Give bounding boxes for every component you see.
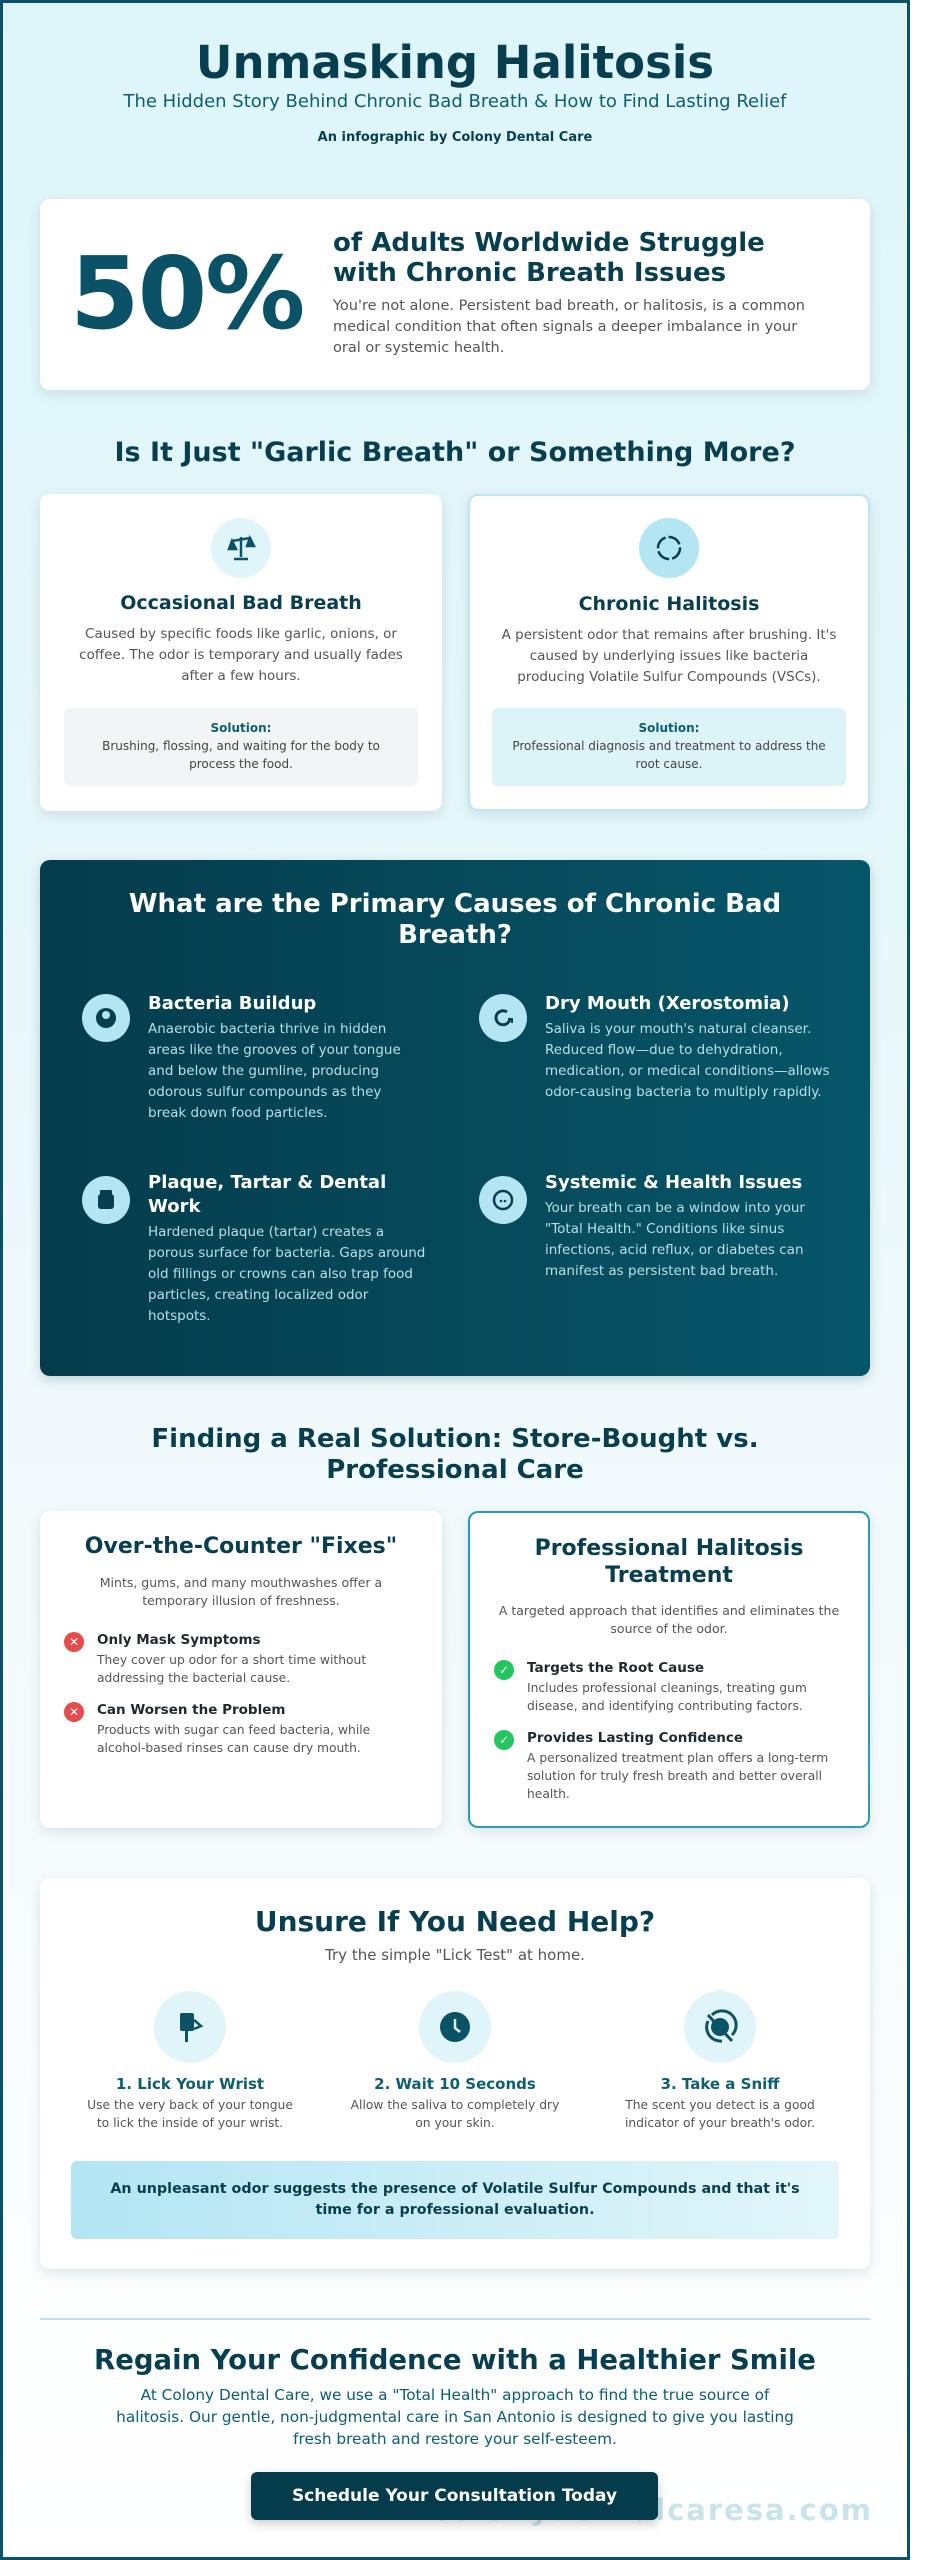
icon: cycle	[639, 518, 699, 578]
step 1	[87, 1991, 293, 2130]
item: confidence: A personalized treatment plan offers a long-term solution for truly fresh breath and better overall health.	[527, 1751, 828, 1801]
item: root: Targets the Root Cause	[527, 1660, 704, 1676]
button	[251, 2472, 658, 2520]
cause: bacteria: Anaerobic bacteria thrive in hidden areas like the grooves of your tongue and below the gumline, producing odorous sulfur compounds as they break down food particles.	[148, 1021, 401, 1121]
panel: OTC: Over-the-Counter "Fixes"	[85, 1534, 397, 1559]
step 1: 1. Lick Your Wrist	[116, 2075, 264, 2093]
panel: professional	[468, 1511, 870, 1828]
item: confidence	[494, 1730, 828, 1801]
callout	[71, 2161, 839, 2239]
step 3: 3. Take a Sniff	[661, 2075, 779, 2093]
byline: An infographic by Colony Dental Care	[318, 130, 592, 145]
icon: x: ✕	[69, 1635, 79, 1649]
step 3	[625, 1991, 815, 2130]
card title: Occasional Bad Breath	[120, 592, 362, 614]
icon: scale	[211, 518, 271, 578]
stat heading: of Adults Worldwide Struggle	[333, 228, 765, 258]
cause: plaque: Plaque, Tartar & Dental Work	[148, 1172, 386, 1217]
item: worsen	[64, 1702, 370, 1755]
cause: plaque	[82, 1172, 425, 1324]
item: mask: They cover up odor for a short time without addressing the bacterial cause.	[97, 1653, 366, 1685]
cause: bacteria: Bacteria Buildup	[148, 993, 316, 1014]
panel: lick test: Try the simple "Lick Test" at home.	[325, 1946, 585, 1964]
icon: wrist	[154, 1991, 226, 2063]
icon: tooth	[82, 1176, 130, 1224]
solution box: Solution:	[210, 721, 271, 735]
solution box: Brushing, flossing, and waiting for the body to process the food.	[102, 739, 380, 771]
card text: Caused by specific foods like garlic, onions, or coffee. The odor is temporary and usually fades after a few hours.	[79, 626, 403, 684]
panel: causes	[40, 860, 870, 1376]
step 3: The scent you detect is a good indicator of your breath's odor.	[625, 2098, 815, 2130]
step 2: 2. Wait 10 Seconds	[374, 2075, 536, 2093]
panel: chronic	[468, 494, 870, 811]
closing heading: Regain Your Confidence with a Healthier Smile	[94, 2344, 816, 2376]
stat text: You're not alone. Persistent bad breath, or halitosis, is a common medical condition that often signals a deeper imbalance in your oral or systemic health.	[333, 298, 805, 356]
item: worsen: Can Worsen the Problem	[97, 1702, 285, 1718]
solution box	[492, 708, 846, 786]
cause: systemic	[479, 1172, 805, 1279]
stat heading: with Chronic Breath Issues	[333, 258, 726, 288]
stat heading	[333, 228, 765, 288]
icon: no smell	[684, 1991, 756, 2063]
panel: professional: A targeted approach that identifies and eliminates the source of the odor.	[499, 1603, 839, 1636]
panel: lick test	[40, 1878, 870, 2269]
icon: clock	[419, 1991, 491, 2063]
icon: check: ✓	[499, 1733, 509, 1747]
solution box: Professional diagnosis and treatment to address the root cause.	[512, 739, 826, 771]
icon: x: ✕	[69, 1705, 79, 1719]
step 2	[350, 1991, 559, 2130]
step 1: Use the very back of your tongue to lick the inside of your wrist.	[87, 2098, 293, 2130]
cause: systemic: Systemic & Health Issues	[545, 1172, 802, 1193]
callout: An unpleasant odor suggests the presence of Volatile Sulfur Compounds and that it's time for a professional evaluation.	[110, 2181, 800, 2218]
solution box	[64, 708, 418, 786]
card title: Chronic Halitosis	[579, 593, 759, 615]
icon: check: ✓	[499, 1663, 509, 1677]
panel: lick test: Unsure If You Need Help?	[255, 1905, 655, 1938]
cause: dry mouth: Dry Mouth (Xerostomia)	[545, 993, 790, 1014]
icon: x	[64, 1632, 84, 1652]
icon: face	[479, 1176, 527, 1224]
icon: x	[64, 1702, 84, 1722]
item: root: Includes professional cleanings, treating gum disease, and identifying contributing factors.	[527, 1681, 807, 1713]
panel: OTC	[40, 1511, 442, 1828]
big stat: 50%	[70, 235, 303, 352]
cause: dry mouth: Saliva is your mouth's natural cleanser. Reduced flow—due to dehydration, medication, or medical conditions—allows odor-causing bacteria to multiply rapidly.	[545, 1021, 830, 1100]
cause: plaque: Hardened plaque (tartar) creates a porous surface for bacteria. Gaps around old fillings or crowns can also trap food particles, creating localized odor hotspots.	[148, 1224, 425, 1324]
icon: bacteria	[82, 994, 130, 1042]
cause: dry mouth	[479, 993, 830, 1100]
step 2: Allow the saliva to completely dry on your skin.	[351, 2098, 559, 2130]
panel: OTC: Mints, gums, and many mouthwashes offer a temporary illusion of freshness.	[100, 1575, 382, 1608]
item: mask	[64, 1632, 366, 1685]
card text: A persistent odor that remains after brushing. It's caused by underlying issues like bacteria producing Volatile Sulfur Compounds (VSCs).	[502, 627, 836, 685]
button: Schedule Your Consultation Today	[292, 2486, 617, 2506]
item: confidence: Provides Lasting Confidence	[527, 1730, 743, 1746]
item: root	[494, 1660, 807, 1713]
item: worsen: Products with sugar can feed bacteria, while alcohol-based rinses can cause dry mouth.	[97, 1723, 370, 1755]
icon: check	[494, 1730, 514, 1750]
panel: professional: Treatment	[605, 1563, 733, 1588]
heading: solutions: Finding a Real Solution: Store-Bought vs. Professional Care	[151, 1424, 759, 1485]
panel: professional: Professional Halitosis	[535, 1536, 803, 1561]
panel: occasional	[40, 494, 442, 811]
causes heading: What are the Primary Causes of Chronic Bad Breath?	[129, 889, 781, 950]
icon: check	[494, 1660, 514, 1680]
closing text: At Colony Dental Care, we use a "Total Health" approach to find the true source of halitosis. Our gentle, non-judgmental care in San Antonio is designed to give you lasting fresh breath and restore your self-esteem.	[116, 2386, 794, 2448]
watermark: www.colonydentalcaresa.com	[335, 2493, 873, 2527]
cause: bacteria	[82, 993, 401, 1121]
title: Unmasking Halitosis	[196, 36, 714, 89]
solution box: Solution:	[638, 721, 699, 735]
cause: systemic: Your breath can be a window into your "Total Health." Conditions like sinus infections, acid reflux, or diabetes can manifest as persistent bad breath.	[545, 1200, 805, 1279]
subtitle: The Hidden Story Behind Chronic Bad Breath & How to Find Lasting Relief	[123, 91, 787, 112]
item: mask: Only Mask Symptoms	[97, 1632, 261, 1648]
icon: dry mouth	[479, 994, 527, 1042]
stat card	[40, 199, 870, 390]
heading: garlic: Is It Just "Garlic Breath" or Something More?	[115, 437, 795, 468]
